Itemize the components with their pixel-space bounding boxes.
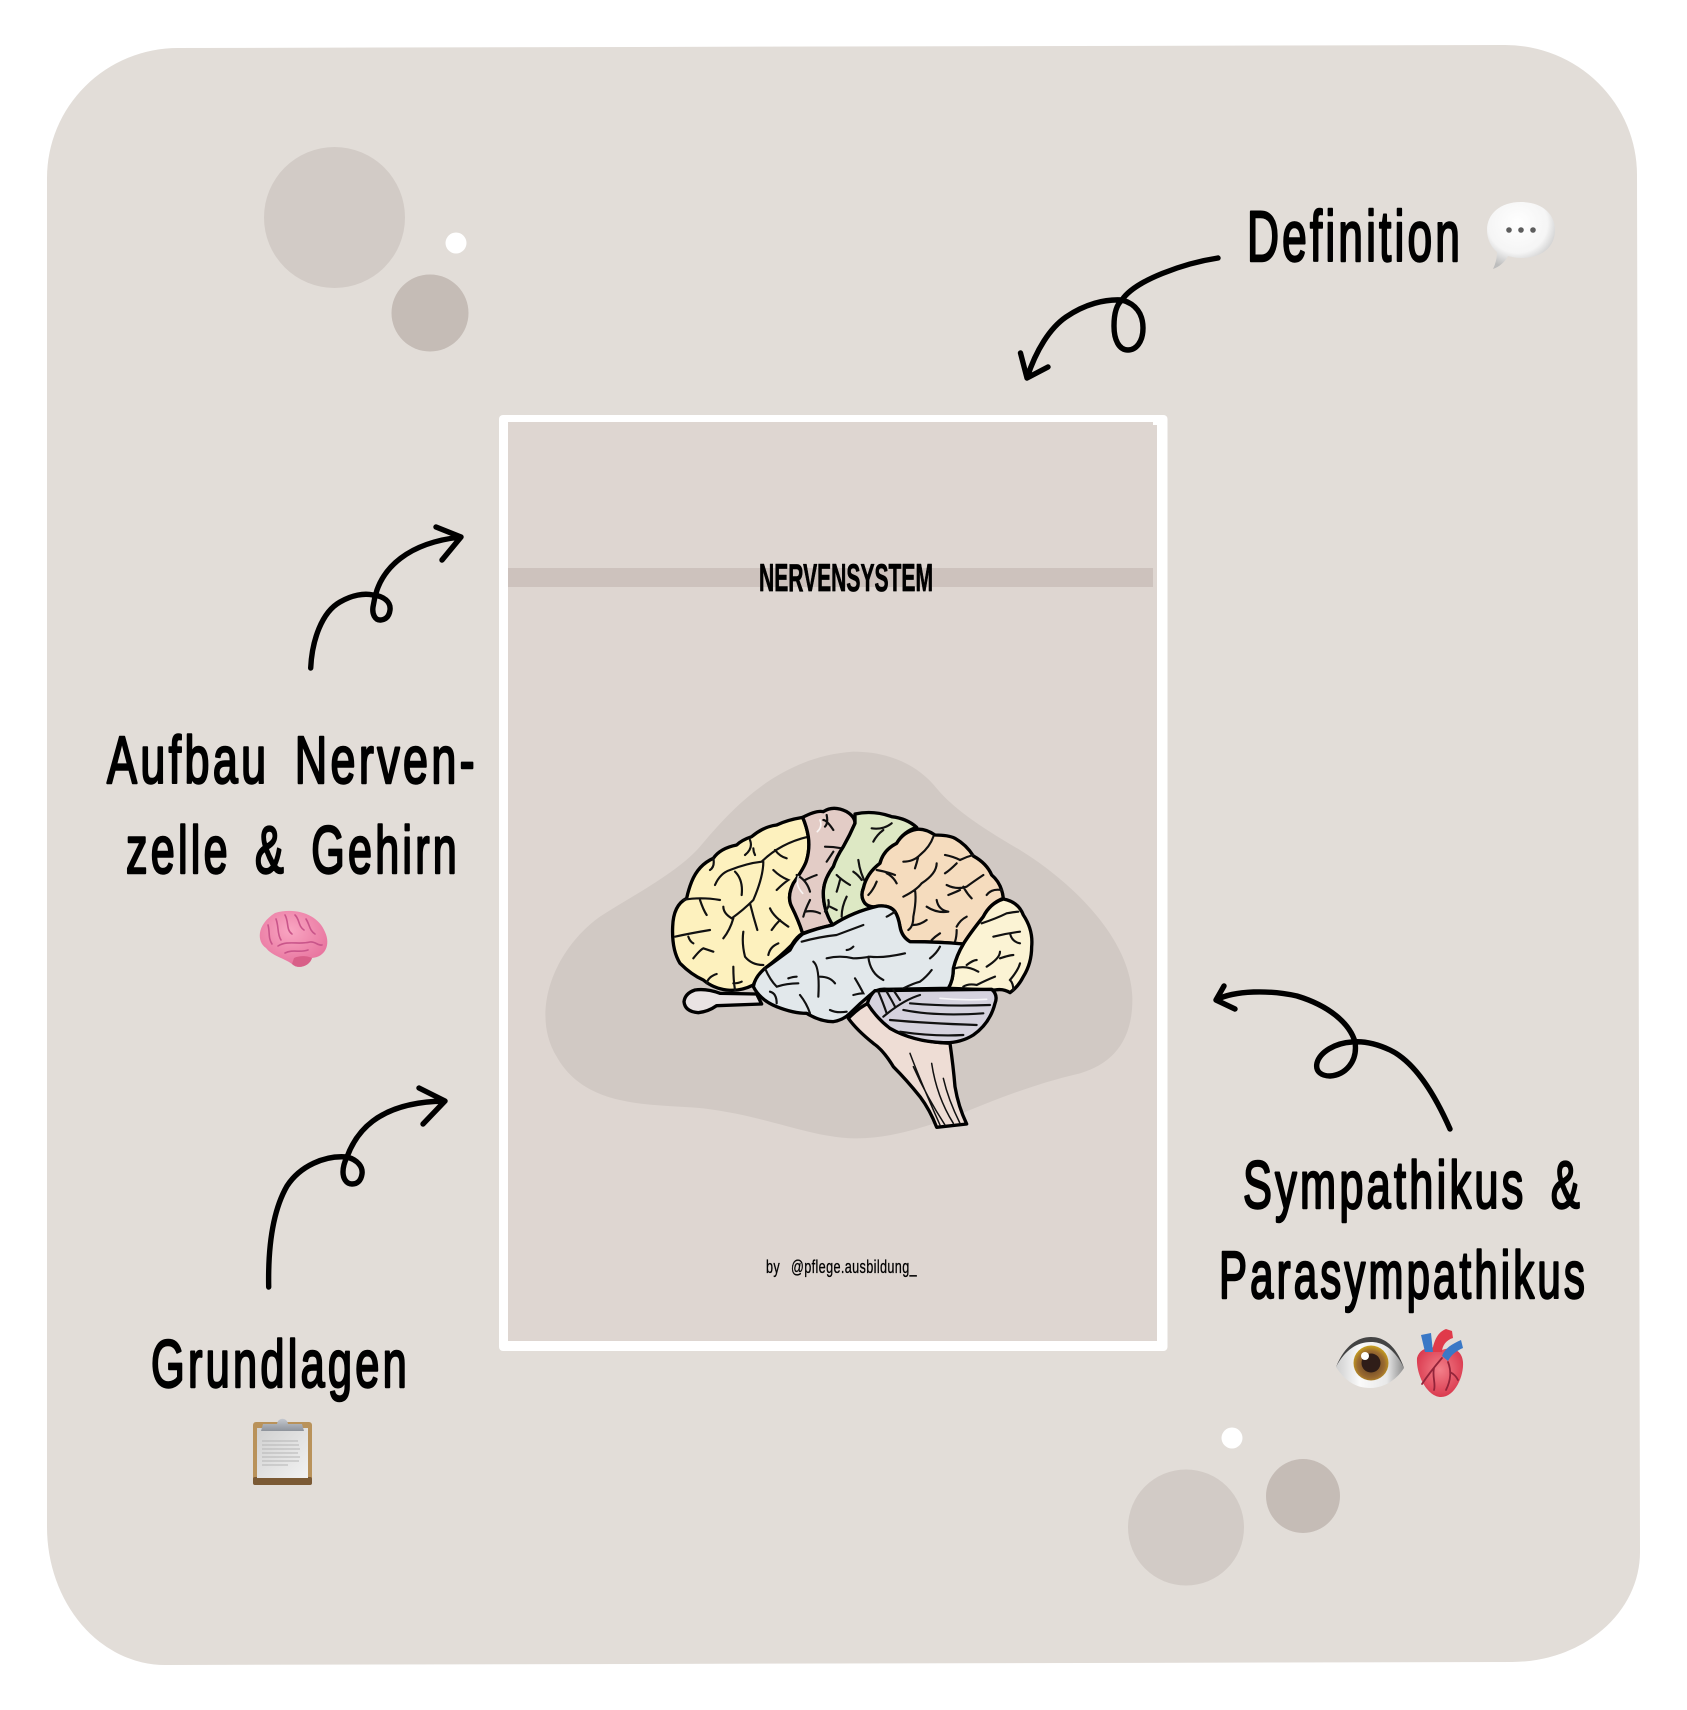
icon: pink brain [260,911,327,967]
cerebellum [867,989,996,1043]
callout: Aufbau Nervenzelle & Gehirn [107,527,478,967]
arrow: to cover top [1020,258,1218,378]
backdrop blob [545,752,1132,1138]
brainstem [848,1003,967,1127]
icon: speech bubble [1487,202,1555,269]
label: zelle & Gehirn: zelle & Gehirn [126,813,460,888]
olfactory bulb [684,990,762,1013]
icon: eye [1336,1337,1404,1388]
label: Definition: Definition [1247,198,1463,277]
icon: clipboard [253,1419,312,1485]
callout: Grundlagen [151,1088,445,1485]
callout: Definition [1020,198,1555,378]
premotor region [790,808,855,933]
cover page [508,422,1157,1341]
title: Nervensystem: NERVENSYSTEM [759,557,933,600]
arrow: to cover right [1216,986,1450,1129]
motor region [823,812,917,925]
document cover panel [499,415,1168,1351]
parietal lobe [862,829,1003,944]
label: Grundlagen: Grundlagen [151,1327,410,1402]
label: Aufbau Nerven-: Aufbau Nerven- [107,723,478,798]
brain illustration with backdrop blob [545,752,1132,1138]
decorative circles: top left [264,147,468,352]
frontal lobe [673,817,809,990]
white frame [499,415,1168,1351]
arrow: to cover left lower [269,1088,445,1287]
temporal lobe [753,906,963,1022]
decorative circles: bottom right [1128,1428,1340,1586]
arrow: to cover left upper [311,527,461,668]
title band [508,568,1153,587]
author credit: by @pflege.ausbildung_ [766,1257,917,1278]
icon: anatomical heart [1417,1329,1463,1397]
occipital lobe [948,899,1032,993]
callout: Sympathikus & Parasympathikus [1216,986,1588,1397]
